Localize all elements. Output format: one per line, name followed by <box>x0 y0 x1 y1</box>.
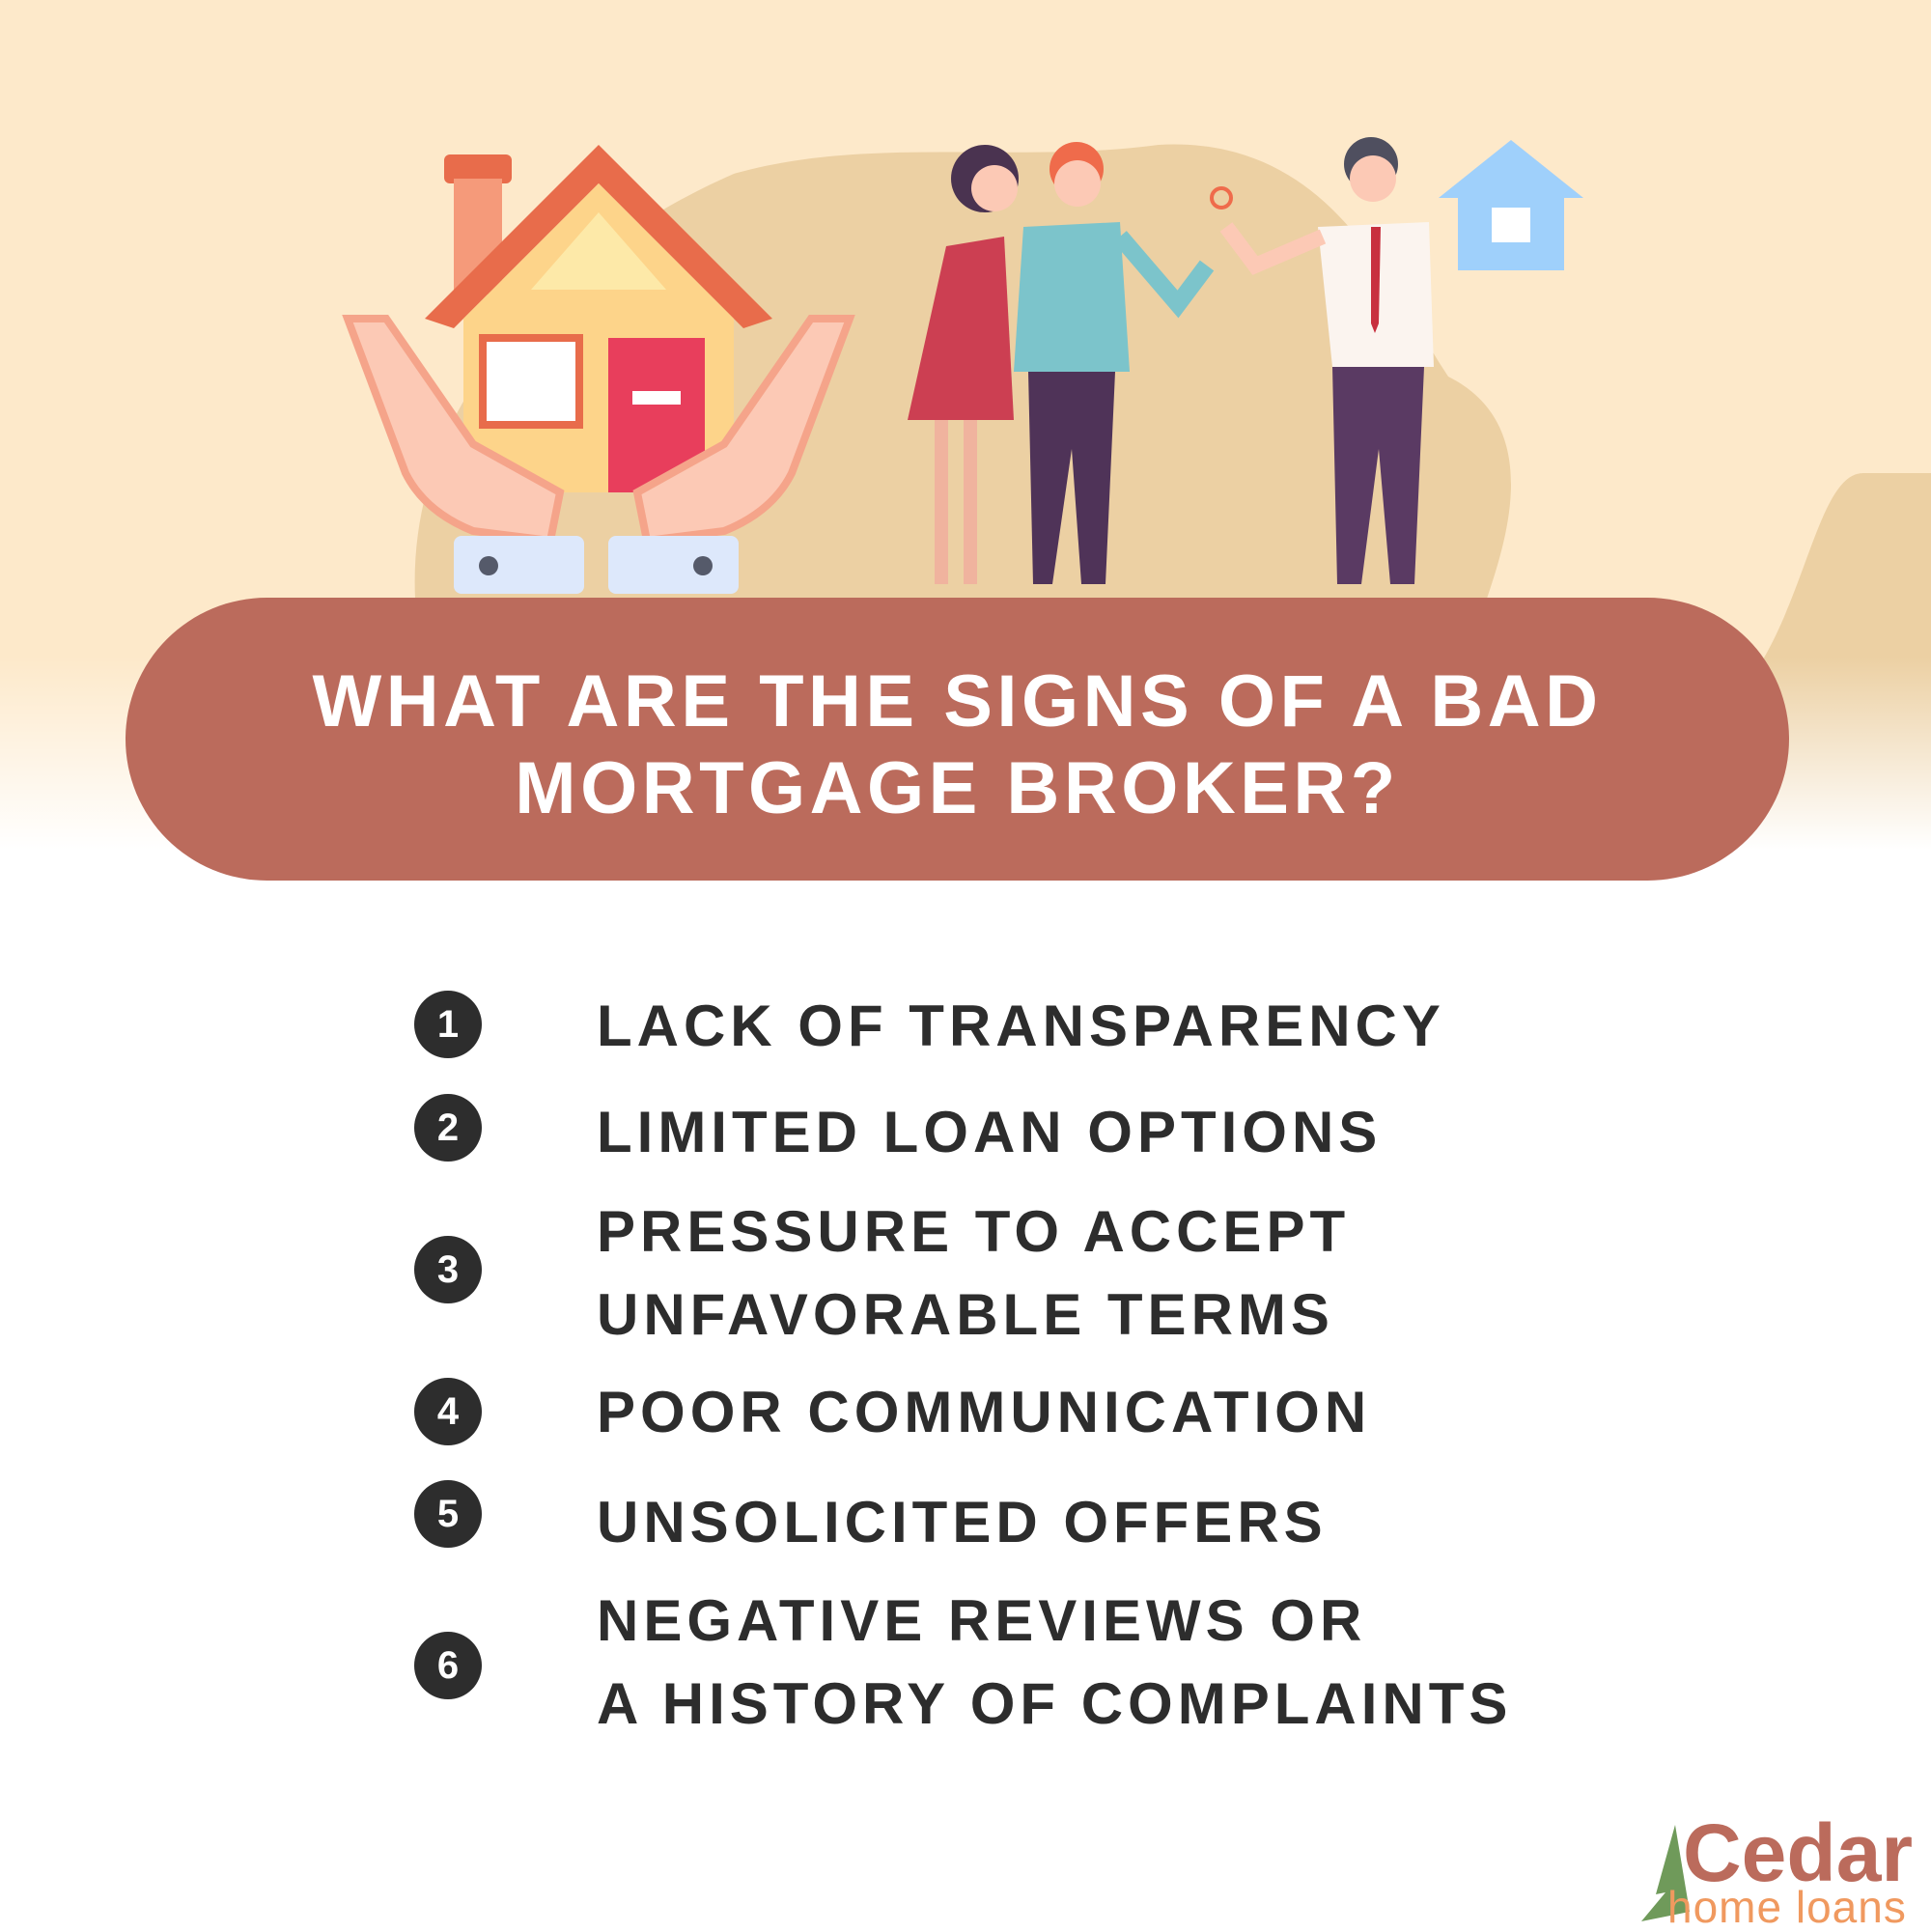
logo text: Cedar <box>1683 1807 1913 1898</box>
list item 2 <box>414 1094 1382 1164</box>
text: negative reviews <box>597 1588 1512 1736</box>
illustration: couple and agent <box>908 137 1583 584</box>
title pill <box>126 598 1789 881</box>
icon: number 4: 4 <box>437 1390 459 1433</box>
text: pressure to accept: UNFAVORABLE TERMS <box>597 1282 1334 1347</box>
text: negative reviews: NEGATIVE REVIEWS OR <box>597 1588 1366 1653</box>
list item 3 <box>414 1199 1350 1347</box>
list item 4 <box>414 1378 1371 1445</box>
text: limited loan options: LIMITED LOAN OPTIONS <box>597 1100 1382 1164</box>
icon: number 1: 1 <box>437 1003 459 1046</box>
icon: number 1 <box>414 991 482 1058</box>
icon: number 5 <box>414 1480 482 1548</box>
title: WHAT ARE THE SIGNS OF A BAD <box>312 660 1603 742</box>
text: poor communication: POOR COMMUNICATION <box>597 1380 1371 1444</box>
icon: number 4 <box>414 1378 482 1445</box>
icon: tree <box>1641 1825 1690 1921</box>
text: pressure to accept <box>597 1199 1350 1347</box>
icon: number 6 <box>414 1632 482 1699</box>
icon: number 2 <box>414 1094 482 1162</box>
text: pressure to accept: PRESSURE TO ACCEPT <box>597 1199 1350 1264</box>
title: MORTGAGE BROKER? <box>515 747 1400 829</box>
title <box>312 660 1603 829</box>
background blobs <box>415 145 1931 809</box>
list item 6 <box>414 1588 1512 1736</box>
text: unsolicited offers: UNSOLICITED OFFERS <box>597 1490 1328 1554</box>
list item 5 <box>414 1480 1328 1554</box>
text: lack of transparency: LACK OF TRANSPARENCY <box>597 994 1445 1058</box>
icon: number 5: 5 <box>437 1493 459 1535</box>
logo: home loans <box>1667 1882 1907 1932</box>
list item 1 <box>414 991 1445 1058</box>
text: negative reviews: A HISTORY OF COMPLAINTS <box>597 1671 1512 1736</box>
icon: number 3 <box>414 1236 482 1303</box>
logo <box>1641 1807 1913 1932</box>
illustration: house in hands <box>342 145 855 594</box>
icon: number 2: 2 <box>437 1106 459 1149</box>
icon: number 3: 3 <box>437 1248 459 1291</box>
icon: number 6: 6 <box>437 1644 459 1687</box>
